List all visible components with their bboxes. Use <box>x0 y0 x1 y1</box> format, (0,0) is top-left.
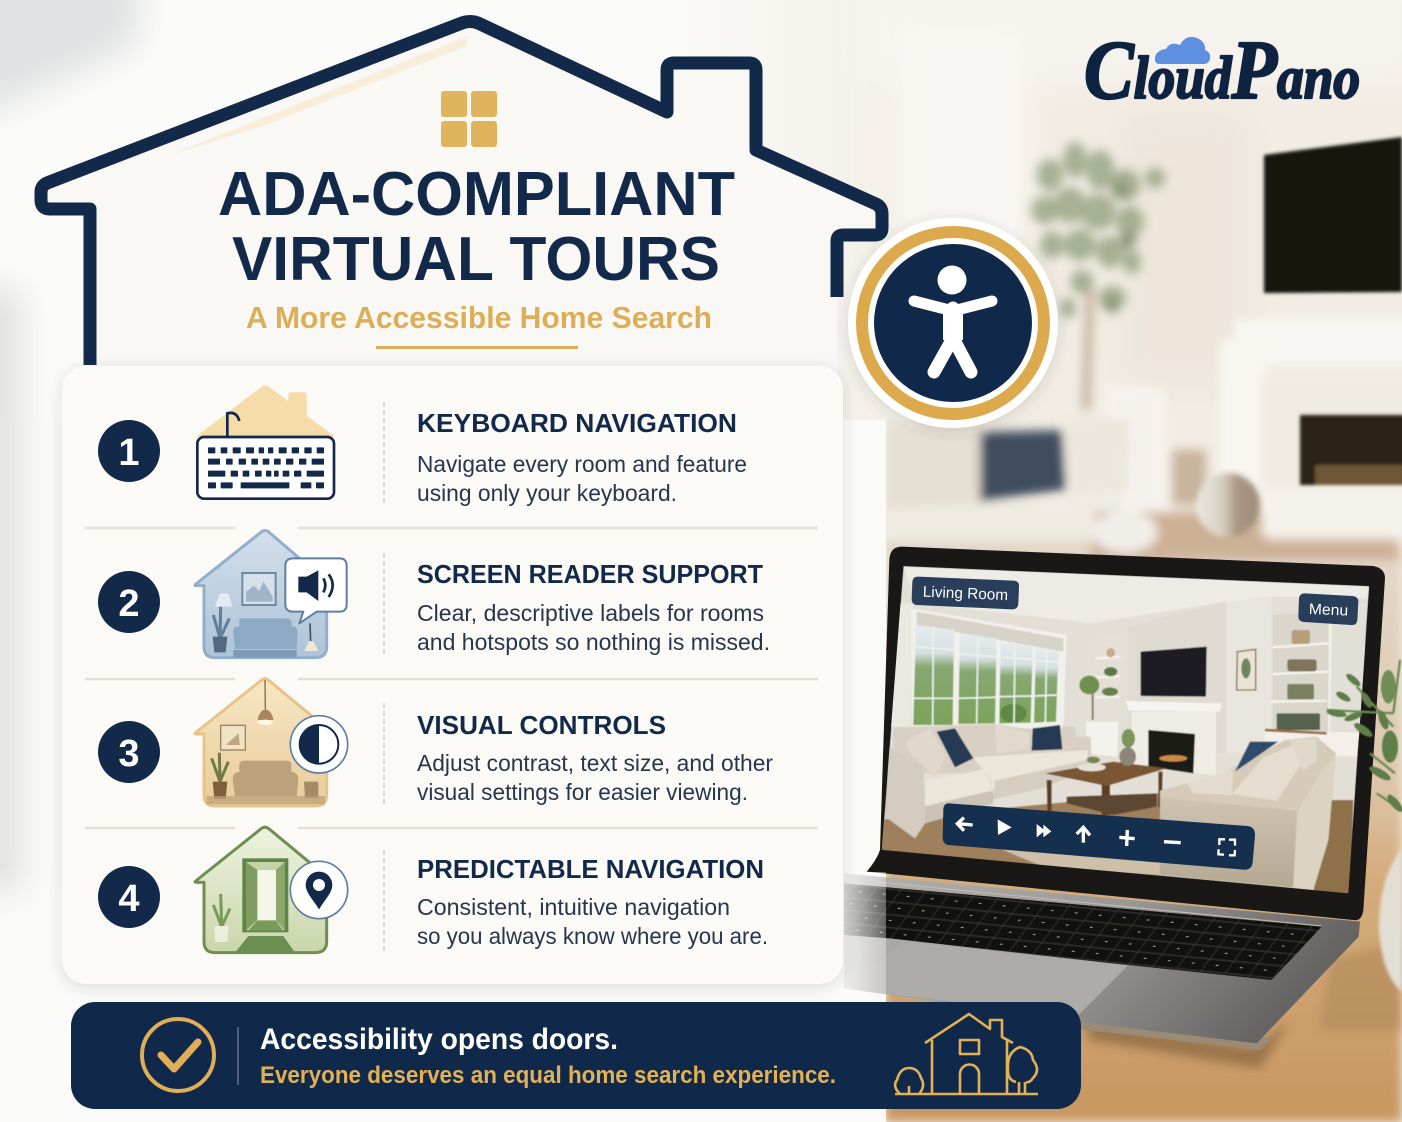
description <box>417 451 747 506</box>
icon: house with location pin <box>195 827 348 953</box>
subtitle <box>246 300 712 349</box>
description: visual settings for easier viewing. <box>417 779 748 805</box>
description <box>417 894 768 949</box>
panel: accessibility features <box>62 366 843 984</box>
icon: keyboard house <box>196 385 335 499</box>
laptop base and deck <box>844 873 1360 1050</box>
room label: Living Room: Living Room <box>923 584 1008 604</box>
heading: VISUAL CONTROLS <box>417 710 666 740</box>
laptop screen bezel <box>867 547 1385 920</box>
pale wash over lower left of background <box>0 420 886 1122</box>
laptop keyboard <box>844 882 1322 980</box>
description: Navigate every room and feature <box>417 451 747 477</box>
number badge 4 <box>98 866 160 928</box>
feature 3: visual controls <box>98 679 773 806</box>
callout: bottom banner <box>71 1002 1081 1109</box>
house outline frame <box>41 22 882 380</box>
description: Consistent, intuitive navigation <box>417 894 730 920</box>
menu button: Menu <box>1309 601 1348 620</box>
title <box>218 160 735 294</box>
description: using only your keyboard. <box>417 480 677 506</box>
title: ADA-COMPLIANT <box>218 160 735 229</box>
icon: house with contrast control <box>195 679 348 806</box>
icon: house with speaker <box>195 530 347 658</box>
menu button <box>1298 593 1358 625</box>
wood grain shading <box>1320 940 1402 1030</box>
logo cloud <box>1155 37 1210 64</box>
number badge 2: 2 <box>118 583 140 625</box>
number badge 4: 4 <box>118 878 140 920</box>
room label: Living Room <box>912 577 1019 609</box>
logo: CloudPano: CloudPano <box>1084 24 1360 117</box>
heading: PREDICTABLE NAVIGATION <box>417 854 764 884</box>
tour navigation toolbar <box>943 803 1255 870</box>
pale wash over laptop left edge <box>843 872 886 1002</box>
feature 4: predictable navigation <box>98 827 768 953</box>
virtual tour room scene <box>877 566 1369 895</box>
heading: SCREEN READER SUPPORT <box>417 559 763 589</box>
icon: window <box>441 91 497 147</box>
description: Clear, descriptive labels for rooms <box>417 600 764 626</box>
number badge 3: 3 <box>118 733 140 775</box>
number badge 1 <box>98 420 160 482</box>
number badge 1: 1 <box>118 432 140 474</box>
white vase <box>1379 848 1402 992</box>
title: VIRTUAL TOURS <box>232 225 720 294</box>
shadow under laptop <box>1085 1020 1290 1068</box>
description: so you always know where you are. <box>417 923 768 949</box>
description <box>417 750 773 805</box>
heading: KEYBOARD NAVIGATION <box>417 408 737 438</box>
banner text: Everyone deserves an equal home search experience. <box>260 1062 836 1089</box>
feature 2: screen reader support <box>98 530 770 658</box>
laptop with virtual tour <box>844 547 1385 1050</box>
banner text: Accessibility opens doors. <box>260 1023 618 1056</box>
icon: accessibility badge <box>848 218 1058 428</box>
soft grey shadows on left wall <box>0 0 140 890</box>
number badge 3 <box>98 721 160 783</box>
icon: check mark <box>142 1019 214 1091</box>
icon: house with trees <box>895 1014 1038 1094</box>
banner text <box>260 1023 836 1089</box>
roof highlight <box>170 36 468 155</box>
foreground plant <box>1326 660 1402 814</box>
description: Adjust contrast, text size, and other <box>417 750 773 776</box>
number badge 2 <box>98 571 160 633</box>
description <box>417 600 770 655</box>
description: and hotspots so nothing is missed. <box>417 629 770 655</box>
feature 1: keyboard navigation <box>98 385 747 506</box>
pale wash over upper left of background <box>0 0 960 420</box>
subtitle: A More Accessible Home Search <box>246 300 712 335</box>
